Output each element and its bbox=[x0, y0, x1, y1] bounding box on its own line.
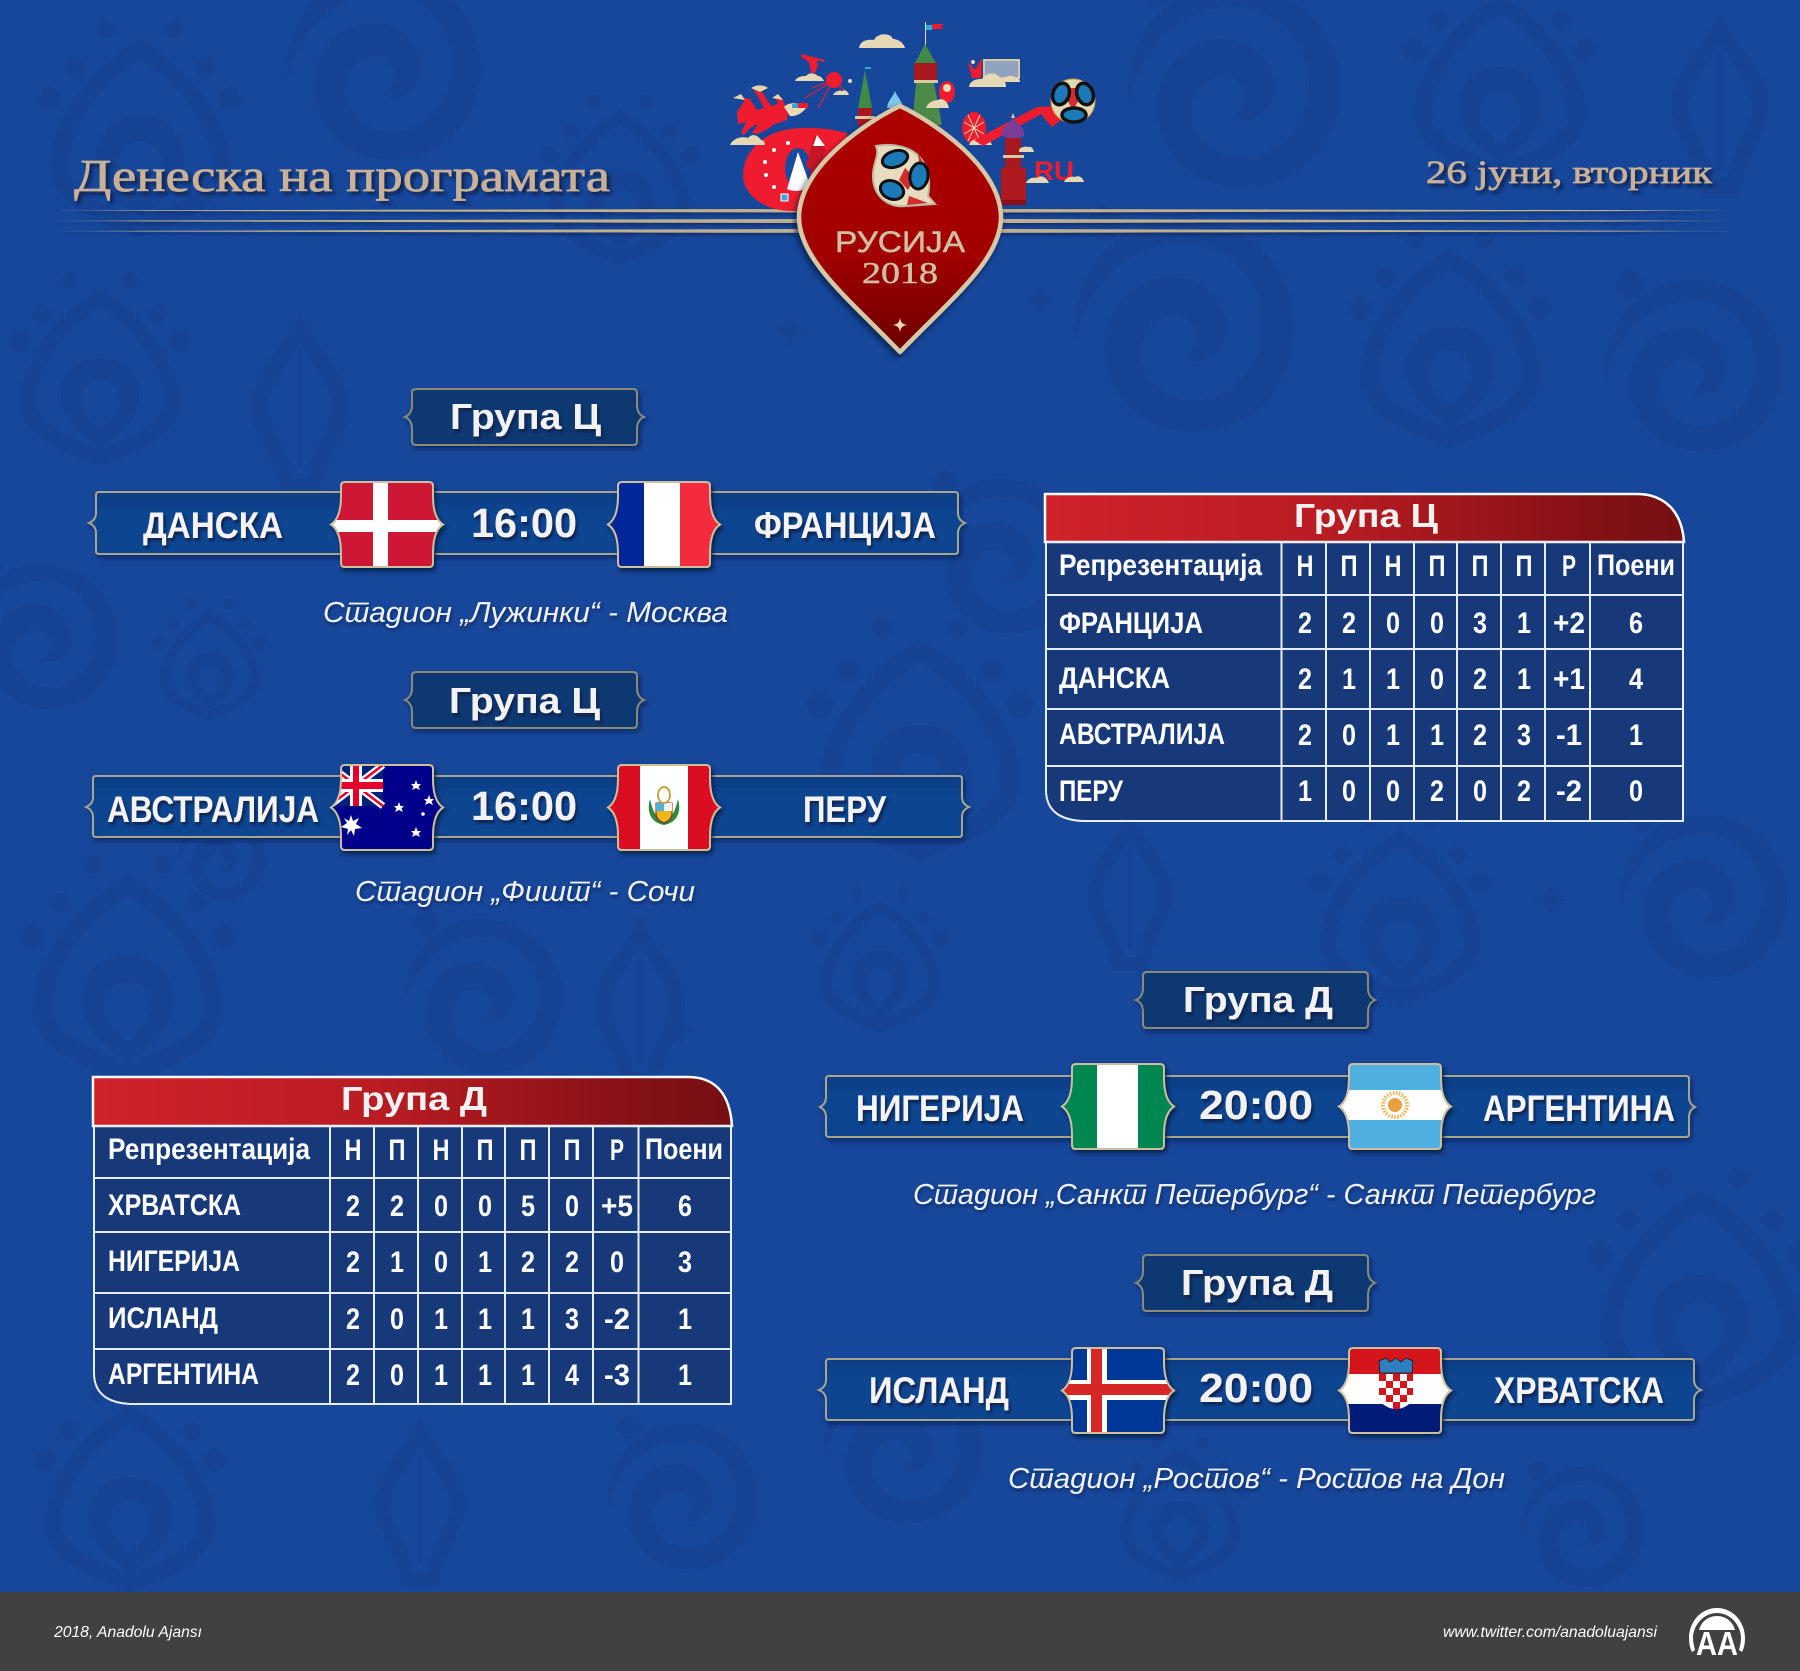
stadium caption: Стадион „Санкт Петербург“ - Санкт Петербург bbox=[913, 1179, 1596, 1211]
icon: cosmonaut with cloud bbox=[795, 54, 825, 81]
row: Australia: 1 bbox=[1629, 719, 1643, 752]
match: Iceland vs Croatia bbox=[819, 1348, 1701, 1433]
row: Denmark: +1 bbox=[1553, 663, 1585, 696]
row: France: +2 bbox=[1553, 607, 1585, 640]
row: Australia: 3 bbox=[1517, 719, 1531, 752]
table: Group D standings bbox=[93, 1077, 732, 1404]
column headings: Репрезентација bbox=[1059, 549, 1262, 582]
row: Nigeria bbox=[108, 1245, 692, 1279]
group label: Group C match 1: Група Ц bbox=[450, 396, 602, 437]
footer credit: 2018, Anadolu Ajansı bbox=[53, 1624, 202, 1641]
team name: ИСЛАНД bbox=[869, 1370, 1009, 1411]
title: Денеска на програмата bbox=[74, 151, 610, 201]
row: Iceland: 3 bbox=[565, 1303, 579, 1336]
table: Group C standings bbox=[1045, 494, 1684, 821]
table header bbox=[1045, 494, 1684, 542]
row: Croatia: 2 bbox=[346, 1190, 360, 1223]
icon: flying ball with red trail bbox=[974, 79, 1096, 146]
row: France: 1 bbox=[1517, 607, 1531, 640]
row: Peru: 0 bbox=[1629, 775, 1643, 808]
column headings: Р bbox=[1562, 550, 1576, 583]
row: Australia: 1 bbox=[1430, 719, 1444, 752]
row: Australia: 2 bbox=[1298, 719, 1312, 752]
row: Croatia: ХРВАТСКА bbox=[108, 1189, 241, 1222]
flag: Croatia bbox=[1337, 1348, 1453, 1433]
row: Nigeria: 1 bbox=[478, 1246, 492, 1279]
row: Nigeria: 2 bbox=[565, 1246, 579, 1279]
illustration: Russian landmarks above the emblem bbox=[730, 22, 1096, 211]
row: Croatia: 2 bbox=[390, 1190, 404, 1223]
group label: Group C match 1 bbox=[405, 389, 644, 445]
icon: small tower bbox=[855, 67, 875, 126]
row: Nigeria: 2 bbox=[346, 1246, 360, 1279]
row: Iceland bbox=[108, 1302, 692, 1336]
icon: top cloud bbox=[859, 34, 905, 48]
row: Denmark: ДАНСКА bbox=[1059, 662, 1170, 695]
row: Iceland: ИСЛАНД bbox=[108, 1302, 218, 1335]
row: France: 0 bbox=[1430, 607, 1444, 640]
row: Peru: 1 bbox=[1298, 775, 1312, 808]
column headings: П bbox=[1428, 550, 1446, 583]
column headings: Н bbox=[1384, 550, 1402, 583]
row: Iceland: 2 bbox=[346, 1303, 360, 1336]
icon: red tower with purple dome bbox=[1001, 113, 1026, 205]
icon: Anadolu Agency logo: AA bbox=[1696, 1625, 1738, 1662]
row: Argentina bbox=[108, 1358, 692, 1392]
team name: АРГЕНТИНА bbox=[1483, 1088, 1675, 1129]
icon: clouds near RU bbox=[1019, 147, 1084, 183]
column headings: Поени bbox=[645, 1133, 723, 1166]
icon: small star bbox=[893, 318, 907, 332]
column headings: Н bbox=[1296, 550, 1314, 583]
row: Australia: АВСТРАЛИЈА bbox=[1059, 718, 1225, 751]
text: 2018: 2018 bbox=[862, 255, 938, 290]
column headings: П bbox=[1340, 550, 1358, 583]
row: Australia: 2 bbox=[1473, 719, 1487, 752]
row: Iceland: -2 bbox=[604, 1303, 630, 1336]
row: Peru: 0 bbox=[1473, 775, 1487, 808]
row: Australia: 1 bbox=[1386, 719, 1400, 752]
row: Argentina: 2 bbox=[346, 1359, 360, 1392]
group label: Group D match 2 bbox=[1136, 1255, 1375, 1311]
column headings: Р bbox=[610, 1134, 624, 1167]
emblem: Russia 2018 badge bbox=[799, 106, 1001, 352]
row: Australia: 0 bbox=[1342, 719, 1356, 752]
row: Nigeria: 3 bbox=[678, 1246, 692, 1279]
row: France: 2 bbox=[1298, 607, 1312, 640]
row: Peru bbox=[1059, 775, 1643, 808]
column headings bbox=[1059, 549, 1675, 583]
icon: sputnik bbox=[805, 72, 852, 108]
column headings: Н bbox=[344, 1134, 362, 1167]
row: Denmark: 2 bbox=[1473, 663, 1487, 696]
row: Denmark: 1 bbox=[1517, 663, 1531, 696]
row: Peru: 2 bbox=[1517, 775, 1531, 808]
icon: goal with figure and clouds bbox=[968, 58, 1020, 87]
kickoff time: 16:00 bbox=[471, 500, 577, 546]
row: Iceland: 0 bbox=[390, 1303, 404, 1336]
match: Australia vs Peru bbox=[86, 765, 969, 850]
column headings: П bbox=[1472, 550, 1488, 583]
row: France bbox=[1059, 607, 1643, 640]
icon: red horses bbox=[733, 85, 808, 135]
row: France: ФРАНЦИЈА bbox=[1059, 607, 1203, 640]
kickoff time: 20:00 bbox=[1199, 1365, 1313, 1411]
table header: Група Д bbox=[341, 1080, 487, 1117]
kickoff time: 20:00 bbox=[1199, 1082, 1313, 1128]
team name: ПЕРУ bbox=[803, 789, 887, 830]
row: Iceland: 1 bbox=[521, 1303, 535, 1336]
column headings: Репрезентација bbox=[108, 1133, 310, 1166]
row: Argentina: АРГЕНТИНА bbox=[108, 1358, 259, 1391]
row: Argentina: 0 bbox=[390, 1359, 404, 1392]
team name: ХРВАТСКА bbox=[1494, 1370, 1664, 1411]
text: РУСИЈА: РУСИЈА bbox=[835, 226, 965, 259]
stadium caption: Стадион „Лужинки“ - Москва bbox=[323, 597, 728, 629]
column headings: П bbox=[1516, 550, 1532, 583]
match: Denmark vs France bbox=[89, 482, 965, 567]
team name: АВСТРАЛИЈА bbox=[107, 789, 319, 830]
flag: Australia bbox=[329, 765, 445, 850]
column headings: П bbox=[388, 1134, 406, 1167]
row: Peru: -2 bbox=[1556, 775, 1582, 808]
stadium caption: Стадион „Ростов“ - Ростов на Дон bbox=[1008, 1463, 1505, 1495]
icon: blue dome bbox=[887, 91, 903, 108]
row: Argentina: 1 bbox=[478, 1359, 492, 1392]
column headings: П bbox=[476, 1134, 494, 1167]
table header bbox=[93, 1077, 732, 1126]
table header: Група Ц bbox=[1294, 497, 1438, 534]
row: Argentina: 1 bbox=[678, 1359, 692, 1392]
row: France: 6 bbox=[1629, 607, 1643, 640]
group label: Group C match 2 bbox=[405, 672, 644, 728]
group label: Group D match 1: Група Д bbox=[1183, 979, 1333, 1020]
row: Argentina: 1 bbox=[521, 1359, 535, 1392]
row: Nigeria: 2 bbox=[521, 1246, 535, 1279]
column headings bbox=[108, 1133, 723, 1167]
icon: main green tower with flag bbox=[912, 22, 944, 125]
team name: ДАНСКА bbox=[143, 505, 283, 546]
column headings: П bbox=[520, 1134, 536, 1167]
row: Argentina: 4 bbox=[565, 1359, 579, 1392]
group label: Group C match 2: Група Ц bbox=[449, 680, 601, 721]
icon: Anadolu Agency logo bbox=[1689, 1608, 1745, 1662]
row: Nigeria: 0 bbox=[434, 1246, 448, 1279]
row: Denmark bbox=[1059, 662, 1643, 696]
icon: red swirl with mountains bbox=[743, 128, 850, 211]
header lines left bbox=[60, 209, 800, 233]
row: Denmark: 0 bbox=[1430, 663, 1444, 696]
row: Peru: 0 bbox=[1386, 775, 1400, 808]
text: RU mark: RU bbox=[1034, 156, 1074, 186]
team name: НИГЕРИЈА bbox=[856, 1088, 1024, 1129]
row: Australia: -1 bbox=[1556, 719, 1582, 752]
row: France: 3 bbox=[1473, 607, 1487, 640]
match: Nigeria vs Argentina bbox=[820, 1064, 1695, 1149]
row: Nigeria: 0 bbox=[610, 1246, 624, 1279]
flag: Nigeria bbox=[1060, 1064, 1176, 1149]
row: Croatia bbox=[108, 1189, 692, 1223]
kickoff time: 16:00 bbox=[471, 783, 577, 829]
row: Croatia: 6 bbox=[678, 1190, 692, 1223]
flag: Denmark bbox=[329, 482, 445, 567]
row: Croatia: 5 bbox=[521, 1190, 535, 1223]
flag: Iceland bbox=[1060, 1348, 1176, 1433]
icon: Faberge egg bbox=[962, 112, 992, 145]
column headings: Н bbox=[432, 1134, 450, 1167]
row: Australia bbox=[1059, 718, 1643, 752]
flag: Peru bbox=[606, 765, 722, 850]
group label: Group D match 1 bbox=[1136, 972, 1375, 1028]
row: Nigeria: НИГЕРИЈА bbox=[108, 1245, 240, 1278]
row: Argentina: 1 bbox=[434, 1359, 448, 1392]
row: Croatia: 0 bbox=[478, 1190, 492, 1223]
row: Peru: ПЕРУ bbox=[1059, 775, 1123, 808]
column headings: П bbox=[564, 1134, 580, 1167]
row: Denmark: 2 bbox=[1298, 663, 1312, 696]
row: Peru: 0 bbox=[1342, 775, 1356, 808]
stadium caption: Стадион „Фишт“ - Сочи bbox=[355, 876, 695, 908]
icon: emblem ball bbox=[873, 145, 935, 206]
date: 26 јуни, вторник bbox=[1426, 155, 1713, 191]
footer bbox=[0, 1592, 1800, 1671]
row: Denmark: 4 bbox=[1629, 663, 1643, 696]
group label: Group D match 2: Група Д bbox=[1181, 1262, 1333, 1303]
flag: France bbox=[606, 482, 722, 567]
row: Croatia: 0 bbox=[565, 1190, 579, 1223]
row: Argentina: -3 bbox=[604, 1359, 630, 1392]
icon: matryoshka with cloud bbox=[926, 81, 955, 108]
row: Nigeria: 1 bbox=[390, 1246, 404, 1279]
row: France: 2 bbox=[1342, 607, 1356, 640]
row: Denmark: 1 bbox=[1342, 663, 1356, 696]
row: Iceland: 1 bbox=[478, 1303, 492, 1336]
icon: cloud under horses bbox=[730, 135, 765, 145]
column headings: Поени bbox=[1597, 549, 1675, 582]
header lines right bbox=[1000, 209, 1727, 233]
row: France: 0 bbox=[1386, 607, 1400, 640]
row: Iceland: 1 bbox=[678, 1303, 692, 1336]
flag: Argentina bbox=[1337, 1064, 1453, 1149]
row: Iceland: 1 bbox=[434, 1303, 448, 1336]
row: Croatia: 0 bbox=[434, 1190, 448, 1223]
footer link: www.twitter.com/anadoluajansi bbox=[1443, 1624, 1657, 1641]
row: Peru: 2 bbox=[1430, 775, 1444, 808]
row: Denmark: 1 bbox=[1386, 663, 1400, 696]
team name: ФРАНЦИЈА bbox=[754, 505, 936, 546]
row: Croatia: +5 bbox=[601, 1190, 633, 1223]
